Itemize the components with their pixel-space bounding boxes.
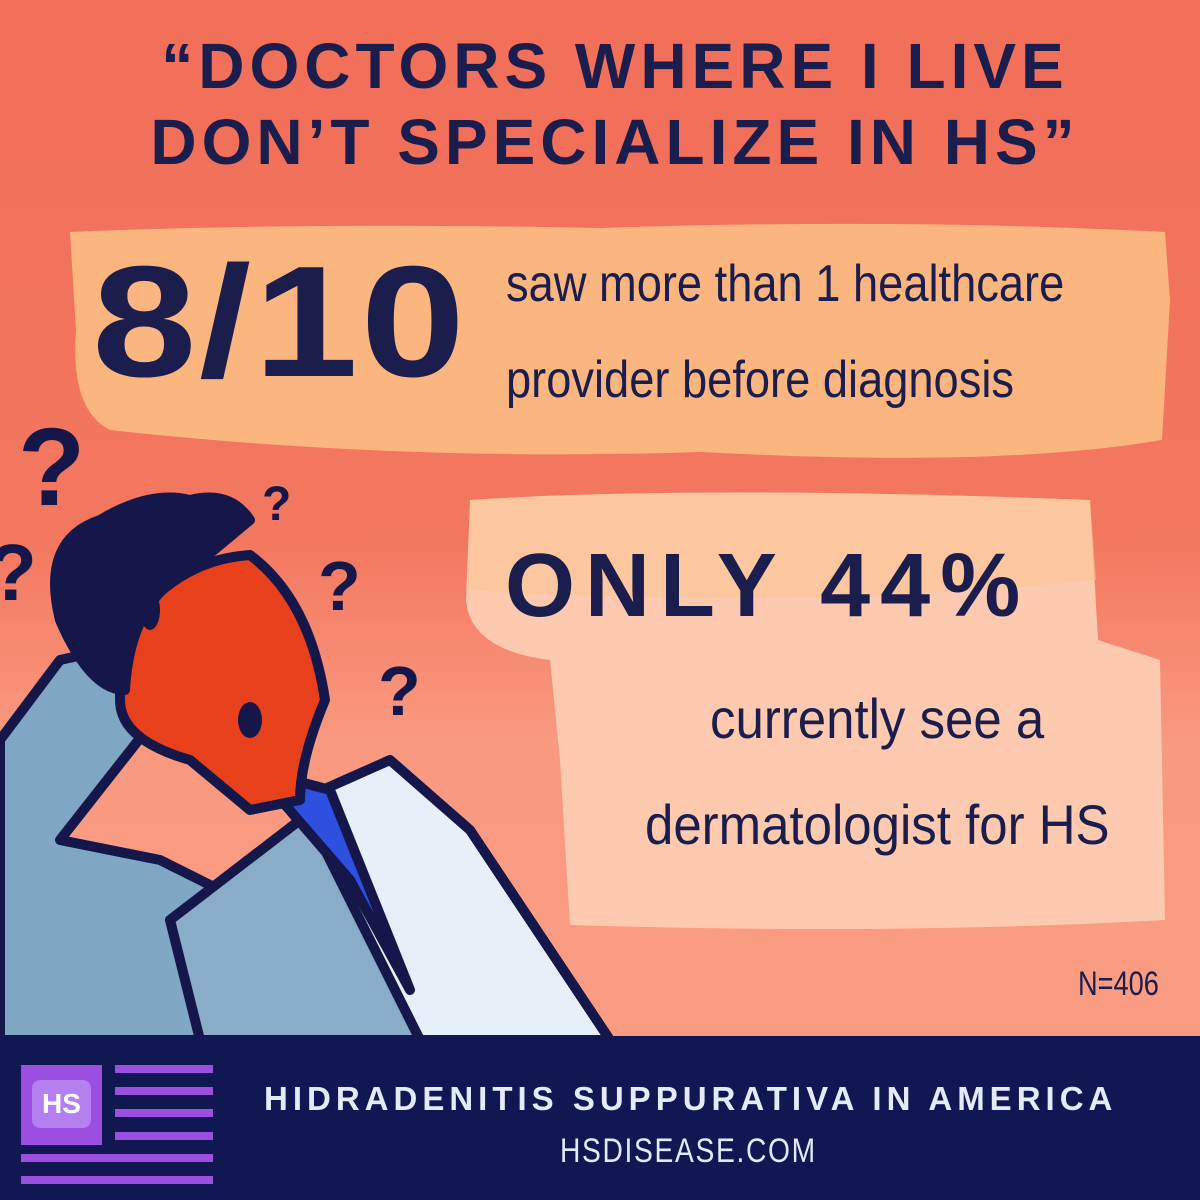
stat 1 text [506,255,1064,409]
coat left [170,820,430,1040]
coat right white [300,760,610,1040]
footer title: HIDRADENITIS SUPPURATIVA IN AMERICA [264,1080,1117,1117]
stat 2 heading: ONLY 44% [505,536,1030,636]
question marks: ? [262,478,291,531]
footer [0,1036,1200,1200]
title: DON’T SPECIALIZE IN HS” [150,106,1080,178]
question marks: ? [18,406,85,529]
shirt [255,770,410,990]
stat 1 text: saw more than 1 healthcare [506,255,1064,313]
hair [55,498,250,690]
big stat 8/10: 8/10 [92,234,467,410]
stat 1 text: provider before diagnosis [506,351,1014,409]
sample size: N=406 [1078,965,1159,1003]
arm [0,640,250,1040]
stat 2 text: dermatologist for HS [645,793,1109,856]
question marks: ? [378,652,421,730]
logo: HS flag [21,1065,213,1184]
question marks: ? [318,547,361,625]
stat 2 text: currently see a [710,687,1044,750]
title [150,30,1080,178]
footer url: HSDISEASE.COM [560,1132,817,1170]
logo: HS flag: HS [42,1088,81,1119]
question marks [0,406,421,730]
neck+head [120,555,325,810]
stat 2 text [645,687,1109,856]
illustration: confused doctor [0,406,614,1036]
title: “DOCTORS WHERE I LIVE [161,30,1069,102]
